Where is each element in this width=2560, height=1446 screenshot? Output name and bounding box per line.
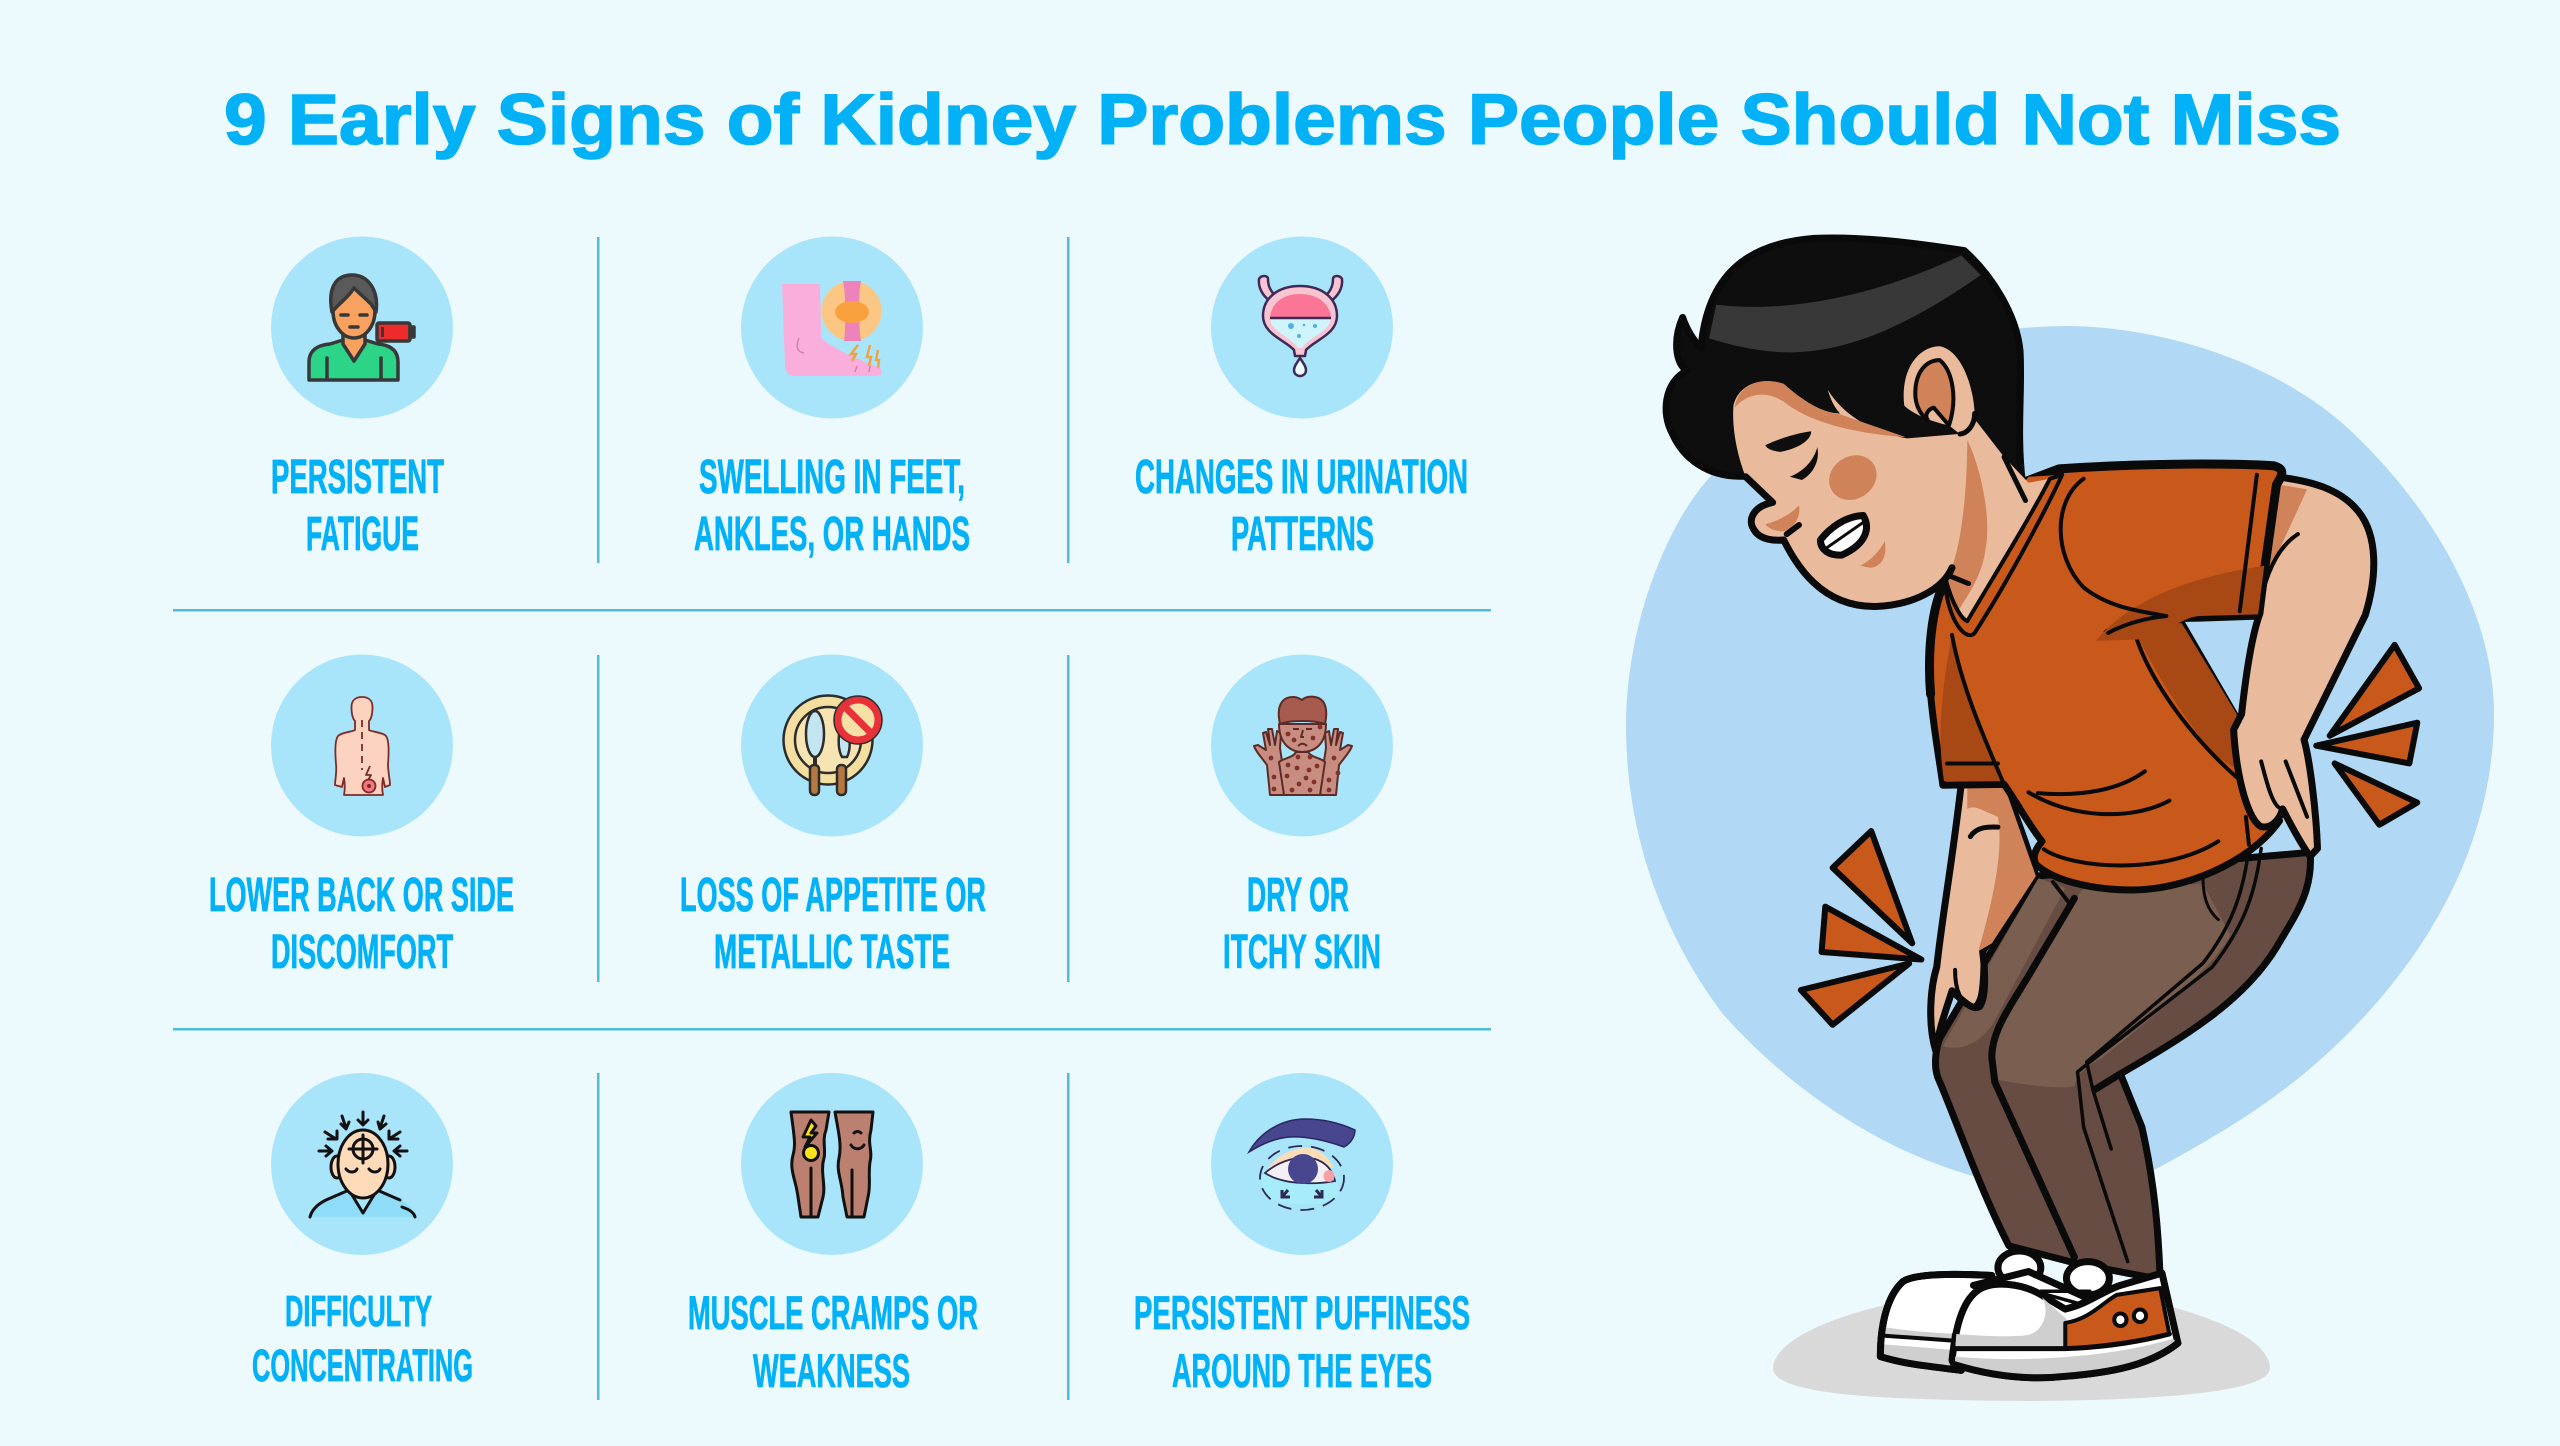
icon circle: concentrating: [271, 1073, 453, 1255]
label: PATTERNS: [1231, 508, 1374, 561]
label: LOWER BACK OR SIDE: [209, 869, 514, 922]
label: CHANGES IN URINATION: [1135, 451, 1468, 504]
icon: head with target and arrows: [310, 1112, 415, 1217]
panel: persistent fatigue: [271, 236, 453, 561]
icon circle: puffiness: [1211, 1073, 1393, 1255]
shoes: [1880, 1251, 2178, 1378]
label: [1135, 451, 1468, 561]
panel: swelling: [694, 236, 970, 561]
icon circle: fatigue: [271, 236, 453, 418]
panel: concentrating: [252, 1073, 473, 1391]
label: [252, 1287, 473, 1391]
label: ANKLES, OR HANDS: [694, 508, 970, 561]
icon: swollen foot and joint: [782, 281, 882, 376]
icon: legs with cramp: [791, 1112, 873, 1217]
ground shadow: [1773, 1305, 2270, 1401]
left arm: [1931, 784, 2036, 1050]
label: AROUND THE EYES: [1172, 1344, 1432, 1397]
illustration background blob: [1626, 326, 2494, 1176]
icon: tired person with low battery: [309, 275, 414, 380]
label: LOSS OF APPETITE OR: [680, 869, 986, 922]
label: PERSISTENT: [271, 451, 444, 504]
icon circle: urination: [1211, 236, 1393, 418]
panel: urination: [1135, 236, 1468, 561]
label: [271, 451, 444, 561]
icon circle: skin: [1211, 654, 1393, 836]
icon: bladder with droplet: [1259, 276, 1342, 376]
panel: appetite: [680, 654, 986, 979]
label: DRY OR: [1247, 869, 1349, 922]
hair: [1666, 238, 2022, 483]
label: FATIGUE: [306, 508, 419, 561]
icon: person with rash: [1254, 697, 1352, 795]
sleeve: [1930, 464, 2282, 694]
title: 9 Early Signs of Kidney Problems People Should Not Miss: [224, 81, 2341, 160]
label: [1134, 1286, 1470, 1397]
label: WEAKNESS: [753, 1344, 910, 1397]
label: [209, 869, 514, 979]
panel: cramps: [688, 1073, 978, 1397]
label: [1223, 869, 1381, 979]
neck: [1946, 421, 2062, 635]
ear: [1904, 346, 1975, 434]
icon: plate with utensils and ban sign: [784, 696, 882, 795]
label: METALLIC TASTE: [714, 926, 950, 979]
label: [694, 451, 970, 561]
icon circle: back: [271, 654, 453, 836]
panel: back discomfort: [209, 654, 514, 979]
icon circle: swelling: [741, 236, 923, 418]
icon: puffy eye: [1249, 1119, 1355, 1210]
label: PERSISTENT PUFFINESS: [1134, 1286, 1470, 1339]
pain marks at knee: [1801, 831, 1921, 1025]
back arm and hand: [2234, 477, 2374, 856]
icon circle: cramps: [741, 1073, 923, 1255]
label: MUSCLE CRAMPS OR: [688, 1286, 978, 1339]
pain marks at back: [2316, 645, 2419, 825]
icon: back with spine pain: [335, 697, 390, 795]
icon circle: appetite: [741, 654, 923, 836]
face: [1733, 381, 1967, 606]
label: DIFFICULTY: [285, 1287, 432, 1336]
label: [680, 869, 986, 979]
panel: puffiness: [1134, 1073, 1470, 1397]
label: [688, 1286, 978, 1397]
character: man with back and knee pain: [1666, 238, 2419, 1378]
label: ITCHY SKIN: [1223, 926, 1381, 979]
label: SWELLING IN FEET,: [699, 451, 965, 504]
panel: dry skin: [1211, 654, 1393, 979]
label: CONCENTRATING: [252, 1340, 473, 1391]
shirt body: [1930, 483, 2280, 890]
trousers: [1935, 848, 2310, 1279]
label: DISCOMFORT: [271, 926, 453, 979]
